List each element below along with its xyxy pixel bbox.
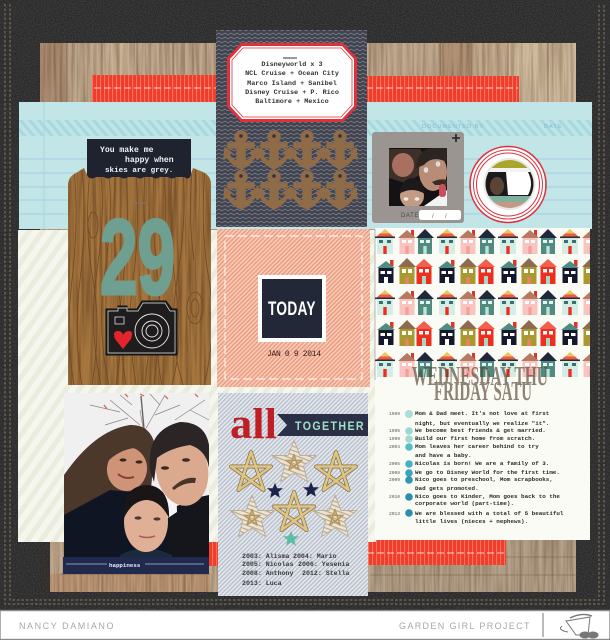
woman [64, 425, 155, 520]
birth years list: 2013: Luca [242, 580, 282, 587]
footer bar [0, 610, 610, 640]
card: travel list and anchors [216, 30, 367, 227]
happiness label: happiness [109, 562, 141, 569]
icon: bucket logo [560, 614, 598, 638]
blue lined paper [19, 102, 592, 229]
stamped weekdays [412, 361, 548, 406]
wood-grain pocket with number and camera [68, 168, 212, 390]
red washi strips, top [92, 75, 519, 103]
boy [120, 550, 172, 557]
small enamel stars [267, 482, 319, 546]
family timeline: Nicolas is born! We are a family of 3. [415, 460, 549, 467]
timeline years: 2013 [389, 511, 400, 517]
red label: Disney Cruise + P. Rico [245, 89, 339, 97]
family timeline: and have a baby. [415, 452, 472, 459]
author name: NANCY DAMIANO [19, 621, 115, 631]
family timeline: Build our first home from scratch. [415, 435, 535, 442]
together banner [277, 414, 368, 436]
family timeline: little lives (nieces + nephews). [415, 518, 528, 525]
family timeline: We become best friends & get married. [415, 427, 546, 434]
birth years list: 2004: Mario [293, 553, 337, 560]
red label: Marco Island + Sanibel [247, 80, 337, 88]
slide frame photo: / [432, 214, 434, 220]
quote label: skies are grey. [105, 167, 173, 175]
red washi strips, bottom [205, 540, 506, 566]
family timeline: Nico goes to preschool, Mom scrapbooks, [415, 476, 553, 483]
number 29: 29 [100, 197, 175, 317]
all together card [218, 393, 368, 596]
today card [217, 229, 370, 387]
timeline years: 2005 [389, 461, 400, 467]
family photo [63, 393, 214, 574]
family timeline: Dad gets promoted. [415, 485, 479, 492]
stamped weekdays: FRIDAY SATU [434, 376, 532, 406]
man [168, 495, 209, 558]
family timeline [389, 410, 564, 525]
wood paper [40, 43, 576, 592]
timeline years: 2004 [389, 444, 400, 450]
birth years list: 2008: Anthony [242, 570, 293, 577]
timeline years: 1989 [389, 411, 400, 417]
together banner: TOGETHER [295, 419, 365, 433]
family timeline: corporate world (part-time). [415, 500, 514, 507]
timeline bullets [405, 410, 413, 517]
quote label [87, 139, 191, 177]
house pattern paper [375, 229, 600, 377]
birth years list [242, 553, 350, 587]
timeline years: 2009 [389, 477, 400, 483]
striped cream panel, left [18, 230, 376, 542]
happiness label [63, 557, 209, 574]
timeline years: 2008 [389, 470, 400, 476]
today card: JAN 0 9 2014 [267, 350, 321, 359]
quote label: You make me [100, 146, 154, 155]
slide frame photo [372, 132, 464, 223]
wood stars [230, 440, 357, 537]
birth years list: 2006: Yesenia [298, 561, 349, 568]
form labels on blue paper: DOCUMENTED BY [422, 124, 484, 130]
family timeline: Mom leaves her career behind to try [415, 443, 539, 450]
white panel, right [375, 228, 590, 540]
red label: Baltimore + Mexico [255, 98, 329, 106]
red label: Disneyworld x 3 [261, 61, 323, 69]
family timeline: Mom & Dad meet. It's not love at first [415, 410, 549, 417]
slide frame photo: DATE [401, 213, 419, 219]
timeline years [389, 411, 400, 517]
wooden anchors [224, 131, 357, 209]
timeline years: 2010 [389, 494, 400, 500]
brand name: GARDEN GIRL PROJECT [399, 621, 531, 631]
quote label: happy when [125, 156, 174, 165]
family timeline: night, but eventually we realize "it". [415, 420, 549, 427]
birth years list: 2005: Nicolas [242, 561, 293, 568]
icon: red heart [114, 331, 132, 349]
birth years list: 2012: Stella [302, 570, 350, 577]
timeline years: 1999 [389, 436, 400, 442]
form labels on blue paper [422, 124, 563, 130]
icon: camera with heart [106, 301, 177, 355]
family timeline: We go to Disney World for the first time. [415, 469, 560, 476]
red label: NCL Cruise + Ocean City [245, 70, 339, 78]
family timeline: We are blessed with a total of 5 beautiful [415, 510, 564, 517]
circle button embellishment [470, 146, 546, 222]
today card: TODAY [268, 298, 316, 320]
form labels on blue paper: DATE [544, 124, 563, 130]
slide frame photo: / [445, 214, 447, 220]
family timeline: Nico goes to Kinder, Mom goes back to the [415, 493, 560, 500]
birth years list: 2003: Alisma [242, 553, 290, 560]
red label [227, 43, 357, 122]
heading all: all [230, 401, 277, 448]
timeline years: 1995 [389, 428, 400, 434]
